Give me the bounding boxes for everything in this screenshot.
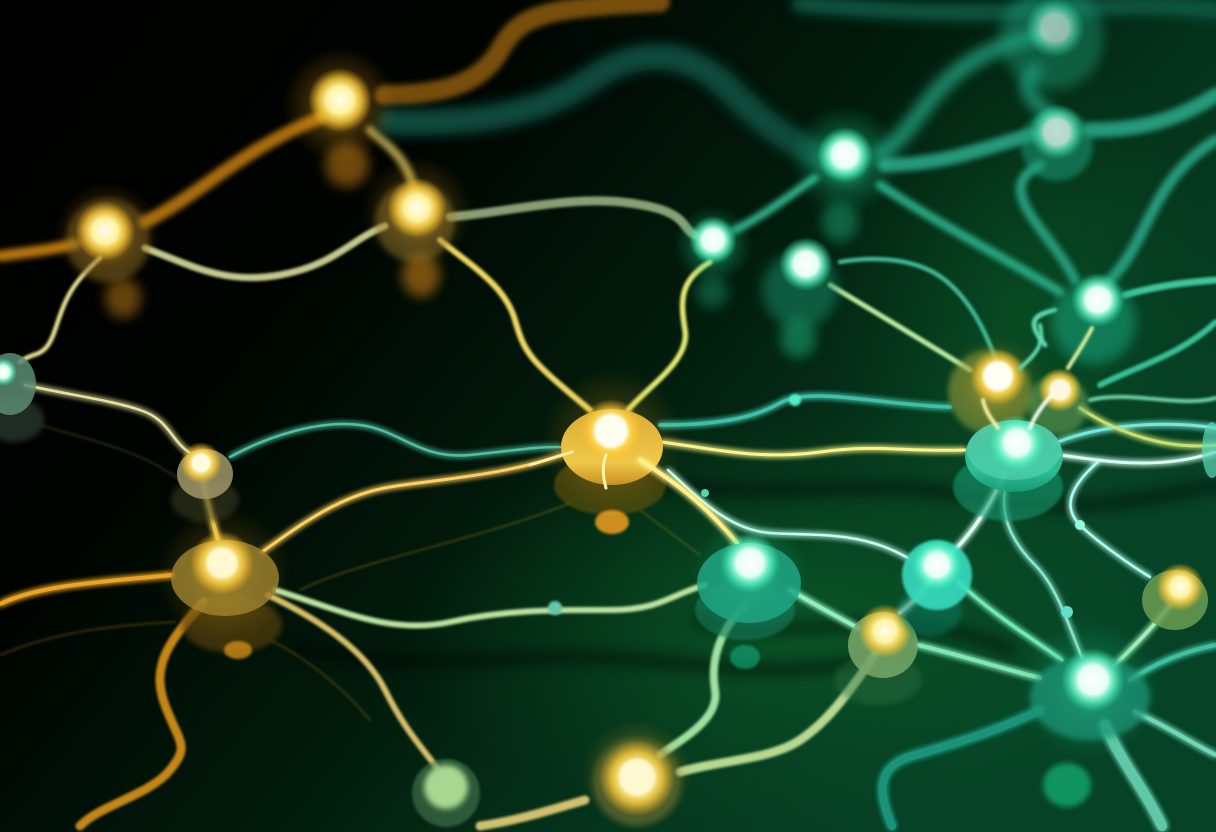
node: right hub [953, 325, 1092, 521]
node: lower left amber [156, 507, 292, 659]
node: top amber [282, 47, 398, 187]
sharp links: left and centre [0, 385, 965, 604]
node: upper middle amber [361, 156, 473, 297]
node: yellow green lower [834, 604, 922, 705]
node: lower right cyan [898, 539, 972, 636]
node: pale yellow right [1028, 368, 1088, 435]
out-of-focus links: upper amber [0, 2, 660, 256]
node: lower centre teal [690, 515, 810, 669]
node: upper right blurred [1021, 104, 1093, 181]
small signal dots [548, 394, 1085, 618]
node: central hub [530, 368, 737, 543]
out-of-focus links: upper green [390, 4, 1216, 160]
node: bottom amber [581, 719, 693, 831]
node: lower right hub [1018, 618, 1162, 807]
node: right amber [945, 335, 1045, 435]
node: small pale [171, 442, 239, 522]
node: pale green bottom [412, 759, 480, 827]
node: teal upper [762, 237, 838, 358]
node: yellow green right [1142, 563, 1208, 630]
node: left edge glass [0, 353, 44, 442]
mid links: pale yellow-green [20, 201, 1216, 410]
node: right edge [1202, 422, 1216, 478]
node: left amber [53, 181, 161, 318]
lower right links [790, 408, 1216, 826]
node: right teal [1052, 273, 1136, 364]
node: top right blurred [1000, 0, 1104, 90]
dark reflected wave lines [300, 480, 1216, 669]
node: small teal upper [673, 205, 753, 308]
faint orange reflections [0, 425, 700, 720]
lower left links [80, 585, 875, 826]
node: upper centre green [789, 104, 901, 242]
